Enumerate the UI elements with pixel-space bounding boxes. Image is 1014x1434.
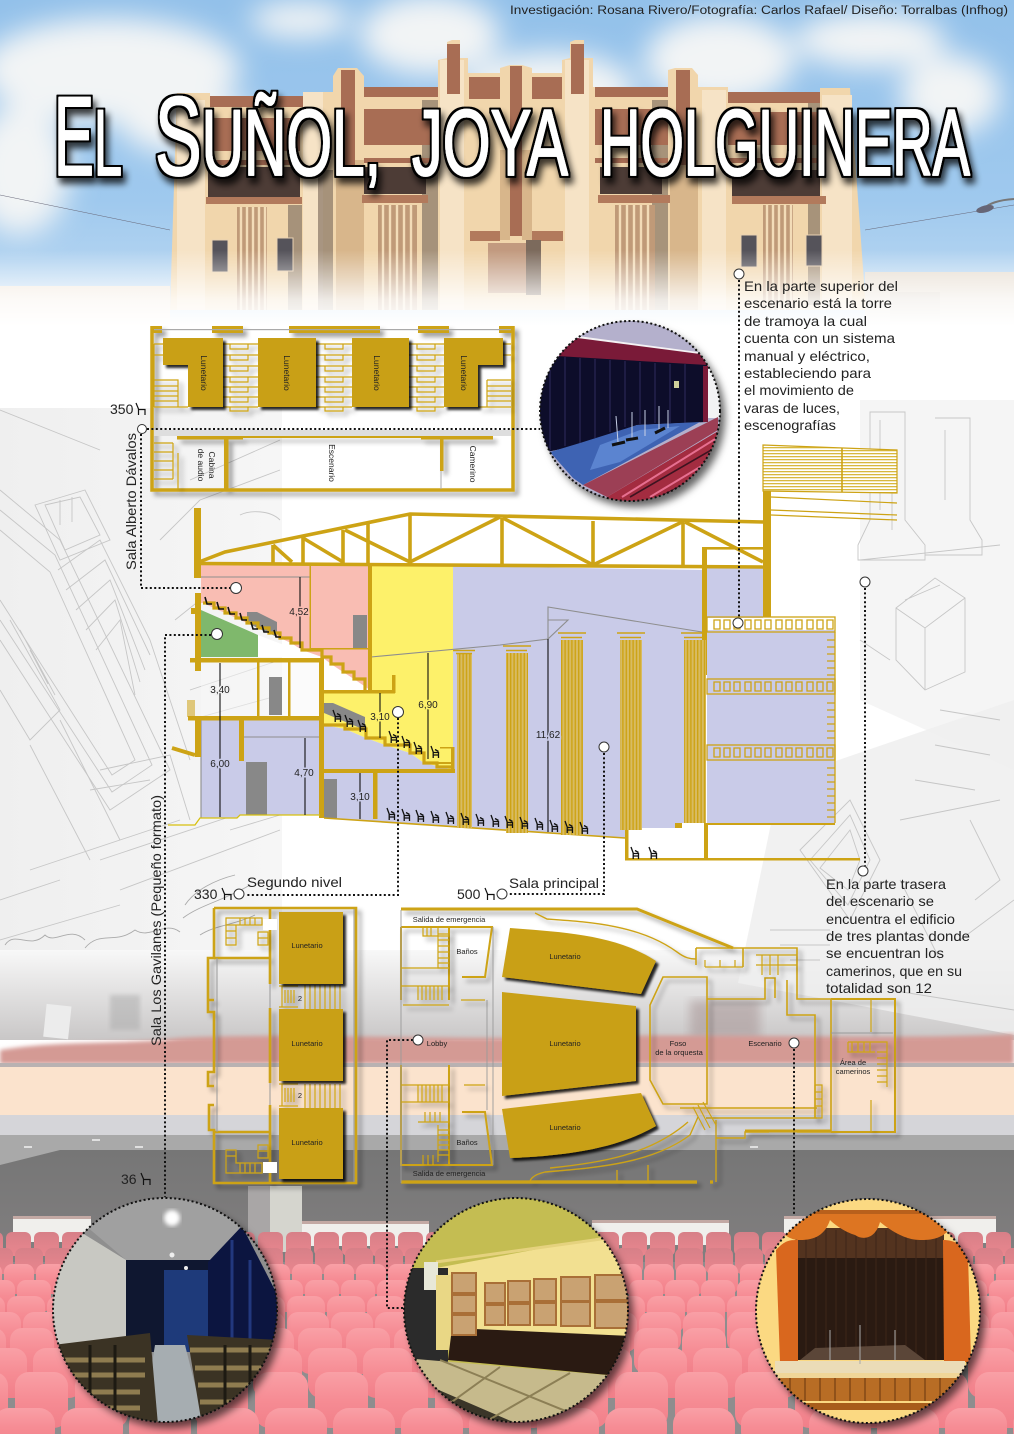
- room labels: Salida de emergencia: [413, 1169, 486, 1178]
- deep shadow columns: [288, 100, 820, 310]
- seating blocks: [279, 912, 343, 1179]
- dimension figures: 3,10: [370, 712, 390, 723]
- text block: edificio de camerinos: se encuentran los: [826, 946, 944, 961]
- text block: edificio de camerinos: encuentra el edificio: [826, 912, 955, 927]
- seating blocks: [502, 928, 656, 1158]
- rotated room labels: Cabina: [207, 452, 217, 479]
- room labels: Foso: [670, 1039, 686, 1048]
- columns: [453, 633, 706, 835]
- rotated room labels: Lunetario: [199, 355, 209, 391]
- rotated room labels: Lunetario: [459, 355, 469, 391]
- seating blocks: [163, 338, 503, 407]
- rotated room labels: [196, 355, 478, 483]
- callout leaders: dotted lines: [141, 280, 865, 1308]
- white fade over the photo: [0, 250, 1014, 326]
- text block: torre de tramoya: cuenta con un sistema: [744, 331, 895, 346]
- relief: [488, 243, 526, 293]
- grey doors: [246, 612, 367, 818]
- pilaster shades: [177, 60, 852, 310]
- text block: torre de tramoya: manual y eléctrico,: [744, 349, 870, 364]
- credits line: Investigación: Rosana Rivero/Fotografía: Carlos Rafael/ Diseño: Torralbas (Infhog): [510, 5, 1008, 17]
- text block: edificio de camerinos: camerinos, que en su: [826, 964, 962, 979]
- stairs: [226, 918, 340, 1173]
- plan: sala principal: [401, 909, 895, 1183]
- room labels: [413, 915, 871, 1178]
- capacity and room labels: 36: [121, 1171, 137, 1187]
- rotated room labels: Camerino: [468, 446, 478, 483]
- text block: edificio de camerinos: En la parte trasera: [826, 877, 946, 892]
- low side buildings: [0, 286, 170, 336]
- white landings: [263, 919, 277, 1173]
- text block: torre de tramoya: escenografías: [744, 418, 836, 433]
- title: EL: [54, 74, 122, 199]
- wiring: [0, 195, 1014, 230]
- title: JOYA: [412, 90, 568, 195]
- rotated room labels: Lunetario: [282, 355, 292, 391]
- text block: torre de tramoya: escenario está la torre: [744, 296, 892, 311]
- colour zones: [201, 565, 835, 838]
- room labels: Lunetario: [291, 941, 323, 950]
- dimension lines: [220, 577, 548, 832]
- room labels: Escenario: [748, 1039, 782, 1048]
- capacity and room labels: 500: [457, 886, 481, 902]
- stage tower galleries: [707, 617, 835, 823]
- photo: main stage from balcony: [540, 321, 721, 505]
- dimension figures: 6,00: [210, 759, 230, 770]
- stepped tiers: [203, 603, 453, 767]
- room labels: Lunetario: [291, 1138, 323, 1147]
- dimension figures: 4,70: [294, 768, 314, 779]
- room labels: [291, 941, 323, 1147]
- room labels: de la orquesta: [655, 1048, 704, 1057]
- room labels: camerinos: [836, 1067, 871, 1076]
- room labels: Área de: [840, 1058, 866, 1067]
- text block: torre de tramoya: En la parte superior del: [744, 279, 898, 294]
- dimension figures: 4,52: [289, 607, 309, 618]
- rotated room labels: Escenario: [327, 444, 337, 482]
- building body: [170, 40, 866, 310]
- background: theatre seating photo: [0, 1034, 1014, 1434]
- plan: Sala Alberto Dávalos upper floor: [151, 326, 514, 490]
- capacity and room labels: Sala principal: [509, 875, 599, 891]
- text block: edificio de camerinos: de tres plantas donde: [826, 929, 970, 944]
- background: architect sketches left: [0, 408, 282, 950]
- capacity and room labels: 330: [194, 886, 218, 902]
- rotated room labels: de audio: [196, 449, 206, 482]
- callout markers: [138, 269, 870, 1048]
- text block: torre de tramoya: estableciendo para: [744, 366, 871, 381]
- roof truss: [199, 514, 763, 567]
- framed paintings: [452, 1273, 628, 1335]
- room labels: Lunetario: [291, 1039, 323, 1048]
- tower brick strips: [210, 44, 820, 236]
- title: [54, 74, 970, 199]
- room labels: Lunetario: [549, 1123, 581, 1132]
- room labels: Baños: [456, 1138, 478, 1147]
- background: white sheet and middle gradient: [0, 326, 1014, 1040]
- rear wall strips: [13, 1216, 996, 1246]
- room labels: Lunetario: [549, 952, 581, 961]
- capacity and room labels: Sala Los Gavilanes (Pequeño formato): [148, 795, 164, 1046]
- dimension figures: 11,62: [536, 730, 561, 741]
- steps between blocks: [154, 344, 511, 489]
- text block: torre de tramoya: el movimiento de: [744, 383, 854, 398]
- capacity and room labels: [110, 401, 599, 1187]
- street lamp: [985, 199, 1014, 208]
- text block: torre de tramoya: de tramoya la cual: [744, 314, 867, 329]
- dimension figures: 3,40: [210, 685, 230, 696]
- main longitudinal section: [168, 445, 897, 860]
- capacity and room labels: 350: [110, 401, 134, 417]
- text block: edificio de camerinos: del escenario se: [826, 894, 934, 909]
- stairs and camerinos: [401, 928, 887, 1165]
- text block: torre de tramoya: [744, 279, 898, 433]
- text block: edificio de camerinos: [826, 877, 970, 996]
- room labels: Lobby: [427, 1039, 447, 1048]
- room labels: 2: [298, 1091, 302, 1100]
- room labels: Baños: [456, 947, 478, 956]
- photo: lobby gallery: [404, 1198, 630, 1425]
- room labels: Salida de emergencia: [413, 915, 486, 924]
- room labels: 2: [298, 994, 302, 1003]
- walls and floors: [187, 491, 860, 860]
- capacity and room labels: Segundo nivel: [247, 874, 342, 890]
- background: architect sketches right: [738, 400, 1014, 1035]
- background: building photo with sky: [0, 0, 1014, 336]
- dimension figures: [210, 607, 561, 803]
- room labels: Lunetario: [549, 1039, 581, 1048]
- grey ceiling lines: [201, 577, 702, 818]
- text block: torre de tramoya: varas de luces,: [744, 401, 840, 416]
- title: SUÑOL,: [155, 74, 381, 199]
- text block: edificio de camerinos: totalidad son 12: [826, 981, 932, 996]
- dimension figures: 6,90: [418, 700, 438, 711]
- rotated room labels: Lunetario: [372, 355, 382, 391]
- seats: [205, 597, 656, 859]
- clouds: [0, 0, 1000, 235]
- fly loft: [763, 445, 897, 520]
- seat rows: [0, 1232, 1014, 1434]
- photo: Sala Los Gavilanes: [53, 1198, 280, 1425]
- plan: segundo nivel: [208, 908, 356, 1183]
- column: [270, 1186, 302, 1252]
- photo: main stage: [756, 1199, 980, 1423]
- dimension figures: 3,10: [350, 792, 370, 803]
- fluted panels: [237, 205, 793, 310]
- small windows: [212, 235, 822, 272]
- capacity and room labels: Sala Alberto Dávalos: [123, 433, 139, 570]
